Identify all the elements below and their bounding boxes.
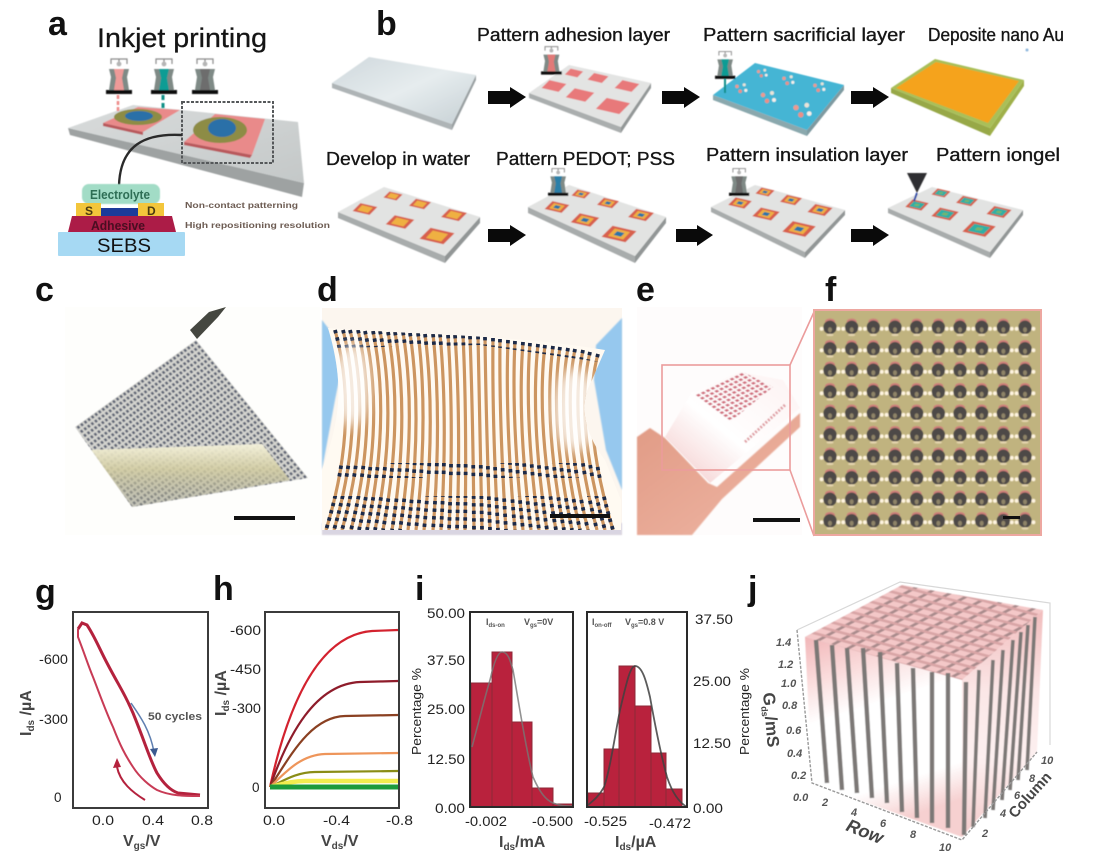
axis tick labels: -600 — [230, 623, 261, 638]
axis titles: /mA — [515, 834, 546, 851]
axis titles: ds — [503, 842, 516, 853]
row and column tick labels — [821, 755, 1054, 854]
axis titles: V — [321, 833, 332, 850]
dashed zoom box — [182, 102, 273, 163]
right axis tick labels: 25.00 — [693, 674, 731, 689]
panel i: histograms — [410, 570, 733, 853]
output curves — [270, 630, 398, 787]
label a: a — [48, 5, 68, 43]
label g: g — [35, 573, 56, 611]
step 2: adhesion layer — [529, 47, 651, 133]
step headings: Deposite nano Au — [928, 25, 1064, 45]
panel b: fabrication steps — [326, 5, 1064, 263]
conductance tick labels: 0.0 — [793, 792, 809, 804]
label d: d — [317, 271, 338, 309]
conductance tick labels — [776, 637, 809, 804]
film with device array — [665, 372, 800, 483]
row and column tick labels: 2 — [981, 828, 988, 840]
left histogram: =0V — [537, 617, 553, 627]
left histogram: I — [486, 617, 489, 627]
left histogram — [470, 612, 573, 807]
panel h: output curve chart — [213, 570, 413, 852]
axis tick labels: 0.0 — [263, 813, 285, 828]
axis tick labels: -300 — [232, 701, 261, 716]
label h: h — [213, 570, 234, 608]
micrograph — [814, 310, 1041, 535]
step 4: nano Au deposit — [891, 48, 1028, 136]
left axis tick labels: 12.50 — [427, 752, 465, 767]
panel d: stretched array photo — [317, 271, 622, 535]
label c: c — [35, 271, 54, 309]
axis side title: Percentage % — [738, 668, 752, 755]
row and column tick labels: 6 — [1014, 790, 1021, 802]
left axis tick labels — [427, 606, 465, 816]
label e: e — [636, 271, 655, 309]
step 5: develop in water — [338, 187, 480, 263]
conductance tick labels: 0.8 — [782, 700, 798, 712]
panel e: film on finger — [636, 271, 814, 536]
finger — [637, 413, 800, 535]
callout text — [185, 200, 330, 230]
panel c: printed array photo — [36, 282, 308, 520]
row and column tick labels: 4 — [850, 807, 857, 819]
bars — [805, 585, 1043, 837]
panel f: micrograph of 10x10 array — [814, 271, 1041, 535]
left axis tick labels: 0.00 — [435, 801, 465, 816]
left axis tick labels: 25.00 — [427, 702, 465, 717]
photo background — [65, 307, 320, 535]
x tick labels: -0.525 — [584, 814, 627, 829]
step headings: Pattern insulation layer — [706, 145, 908, 165]
axis titles: V — [123, 833, 134, 850]
callout text: Non-contact patterning — [185, 200, 298, 210]
axis titles: Row — [844, 815, 887, 848]
axis tick labels: -0.8 — [386, 813, 413, 828]
holder clip — [190, 307, 226, 339]
x tick labels: -0.002 — [465, 814, 507, 829]
axis tick labels: -300 — [39, 712, 68, 727]
step headings: Pattern sacrificial layer — [703, 25, 905, 45]
axis tick labels — [39, 652, 213, 828]
axis titles: gs — [134, 841, 146, 852]
axis tick labels: -450 — [230, 662, 261, 677]
x tick labels — [465, 814, 691, 831]
3D frame — [797, 582, 1050, 745]
label j: j — [747, 570, 757, 608]
conductance tick labels: 1.4 — [776, 637, 791, 649]
axis tick labels: -600 — [39, 652, 68, 667]
printer nozzles — [106, 59, 218, 111]
photo background with gloves — [322, 308, 622, 535]
axis tick labels: 0 — [54, 790, 62, 805]
blue arrow and cycles note: 50 cycles — [148, 711, 202, 723]
photo background — [637, 307, 802, 535]
axis titles — [410, 668, 657, 853]
scale bar — [753, 518, 800, 522]
heading: Inkjet printing: Inkjet printing — [97, 23, 267, 53]
row and column tick labels: 8 — [910, 829, 917, 841]
top face — [805, 585, 1043, 680]
conductance tick labels: 1.2 — [778, 659, 793, 671]
left axis tick labels: 37.50 — [427, 653, 465, 668]
label f: f — [825, 271, 837, 309]
row and column tick labels: 2 — [821, 797, 828, 809]
step headings: Pattern adhesion layer — [477, 25, 670, 45]
axis titles: ds — [759, 706, 770, 717]
right face — [962, 610, 1043, 837]
right histogram: I — [592, 617, 595, 627]
right histogram: V — [625, 617, 631, 627]
axis titles: ds — [221, 699, 232, 712]
x tick labels: -0.500 — [532, 814, 573, 829]
axis titles: I — [213, 712, 230, 716]
device layer stack: S — [85, 204, 93, 218]
bar edge stripes — [816, 617, 1035, 835]
blue arrow and cycles note — [131, 703, 202, 757]
axis tick labels: 0.8 — [191, 813, 213, 828]
device layer stack: D — [147, 204, 156, 218]
left histogram: ds-on — [489, 623, 505, 629]
device layer stack — [58, 184, 185, 257]
right axis tick labels: 0.00 — [693, 801, 723, 816]
axis titles: /µA — [631, 834, 657, 851]
printed sheet — [75, 340, 308, 507]
right axis tick labels: 12.50 — [693, 736, 731, 751]
axis lines — [797, 630, 1037, 840]
axis titles: I — [499, 834, 503, 851]
magnification box and leader lines — [662, 312, 814, 536]
left histogram: V — [524, 617, 530, 627]
scale bar — [550, 514, 610, 518]
axis tick labels — [230, 623, 413, 828]
substrate slab with printed devices — [68, 105, 304, 197]
process arrows — [488, 87, 889, 246]
left histogram: gs — [530, 623, 538, 629]
connector curve — [119, 135, 182, 186]
panel j: 3D conductance bar chart — [738, 570, 1055, 854]
device layer stack: SEBS — [97, 236, 151, 257]
axis titles — [18, 690, 161, 852]
label b: b — [376, 5, 397, 43]
axis tick labels: 0.4 — [142, 813, 165, 828]
axis titles: Percentage % — [410, 668, 424, 755]
row and column tick labels: 10 — [939, 842, 952, 854]
device layer stack: Electrolyte — [90, 188, 150, 202]
step 3: sacrificial layer — [713, 52, 844, 136]
step 6: PEDOT PSS — [528, 169, 666, 263]
step headings: Develop in water — [326, 149, 470, 169]
row and column tick labels: 10 — [1041, 755, 1054, 767]
axis titles: ds — [332, 841, 344, 852]
axis titles: Column — [1005, 769, 1055, 822]
axis titles: G — [759, 692, 779, 707]
right histogram — [587, 612, 687, 807]
axis tick labels: 0.0 — [92, 813, 114, 828]
axis titles: I — [615, 834, 619, 851]
transfer curves — [78, 623, 200, 800]
axis tick labels: 0 — [252, 780, 260, 795]
panel g: transfer curve chart — [18, 573, 213, 852]
panel a: inkjet printing schematic — [48, 5, 330, 257]
axis titles: /µA — [213, 670, 230, 700]
axis titles: ds — [26, 719, 37, 732]
step headings — [326, 25, 1064, 169]
scale bar — [1003, 516, 1020, 519]
right histogram: on-off — [595, 623, 613, 629]
conductance tick labels: 0.2 — [791, 770, 806, 782]
axis titles: /mS — [761, 715, 783, 748]
row and column tick labels: 8 — [1029, 773, 1036, 785]
step 7: insulation layer — [711, 169, 845, 258]
axis titles: /µA — [18, 690, 35, 720]
axis titles: I — [18, 732, 35, 736]
step headings: Pattern PEDOT; PSS — [496, 149, 675, 169]
axis titles — [213, 670, 359, 852]
stretched grid — [322, 320, 622, 535]
row and column tick labels: 6 — [880, 818, 887, 830]
conductance tick labels: 1.0 — [781, 678, 797, 690]
row and column tick labels: 4 — [999, 808, 1006, 820]
frame — [73, 612, 208, 808]
step 1: bare substrate — [332, 57, 476, 130]
right histogram: gs — [631, 623, 639, 629]
front face — [805, 637, 962, 837]
axis titles: /V — [343, 833, 359, 850]
right histogram: =0.8 V — [638, 617, 664, 627]
axis titles — [758, 692, 1055, 848]
axis titles: /V — [145, 833, 161, 850]
axis titles: ds — [619, 842, 632, 853]
scale bar — [234, 516, 295, 520]
step headings: Pattern iongel — [936, 145, 1060, 165]
conductance tick labels: 0.6 — [786, 725, 802, 737]
label i: i — [415, 570, 424, 608]
conductance tick labels: 0.4 — [787, 748, 802, 760]
callout text: High repositioning resolution — [185, 220, 330, 230]
left axis tick labels: 50.00 — [427, 606, 465, 621]
device layer stack: Adhesive — [91, 219, 145, 233]
step 8: iongel — [888, 173, 1023, 258]
axis tick labels: -0.4 — [323, 813, 351, 828]
frame — [265, 612, 399, 808]
right axis tick labels: 37.50 — [695, 612, 733, 627]
right axis tick labels — [693, 612, 733, 816]
x tick labels: -0.472 — [649, 816, 691, 831]
